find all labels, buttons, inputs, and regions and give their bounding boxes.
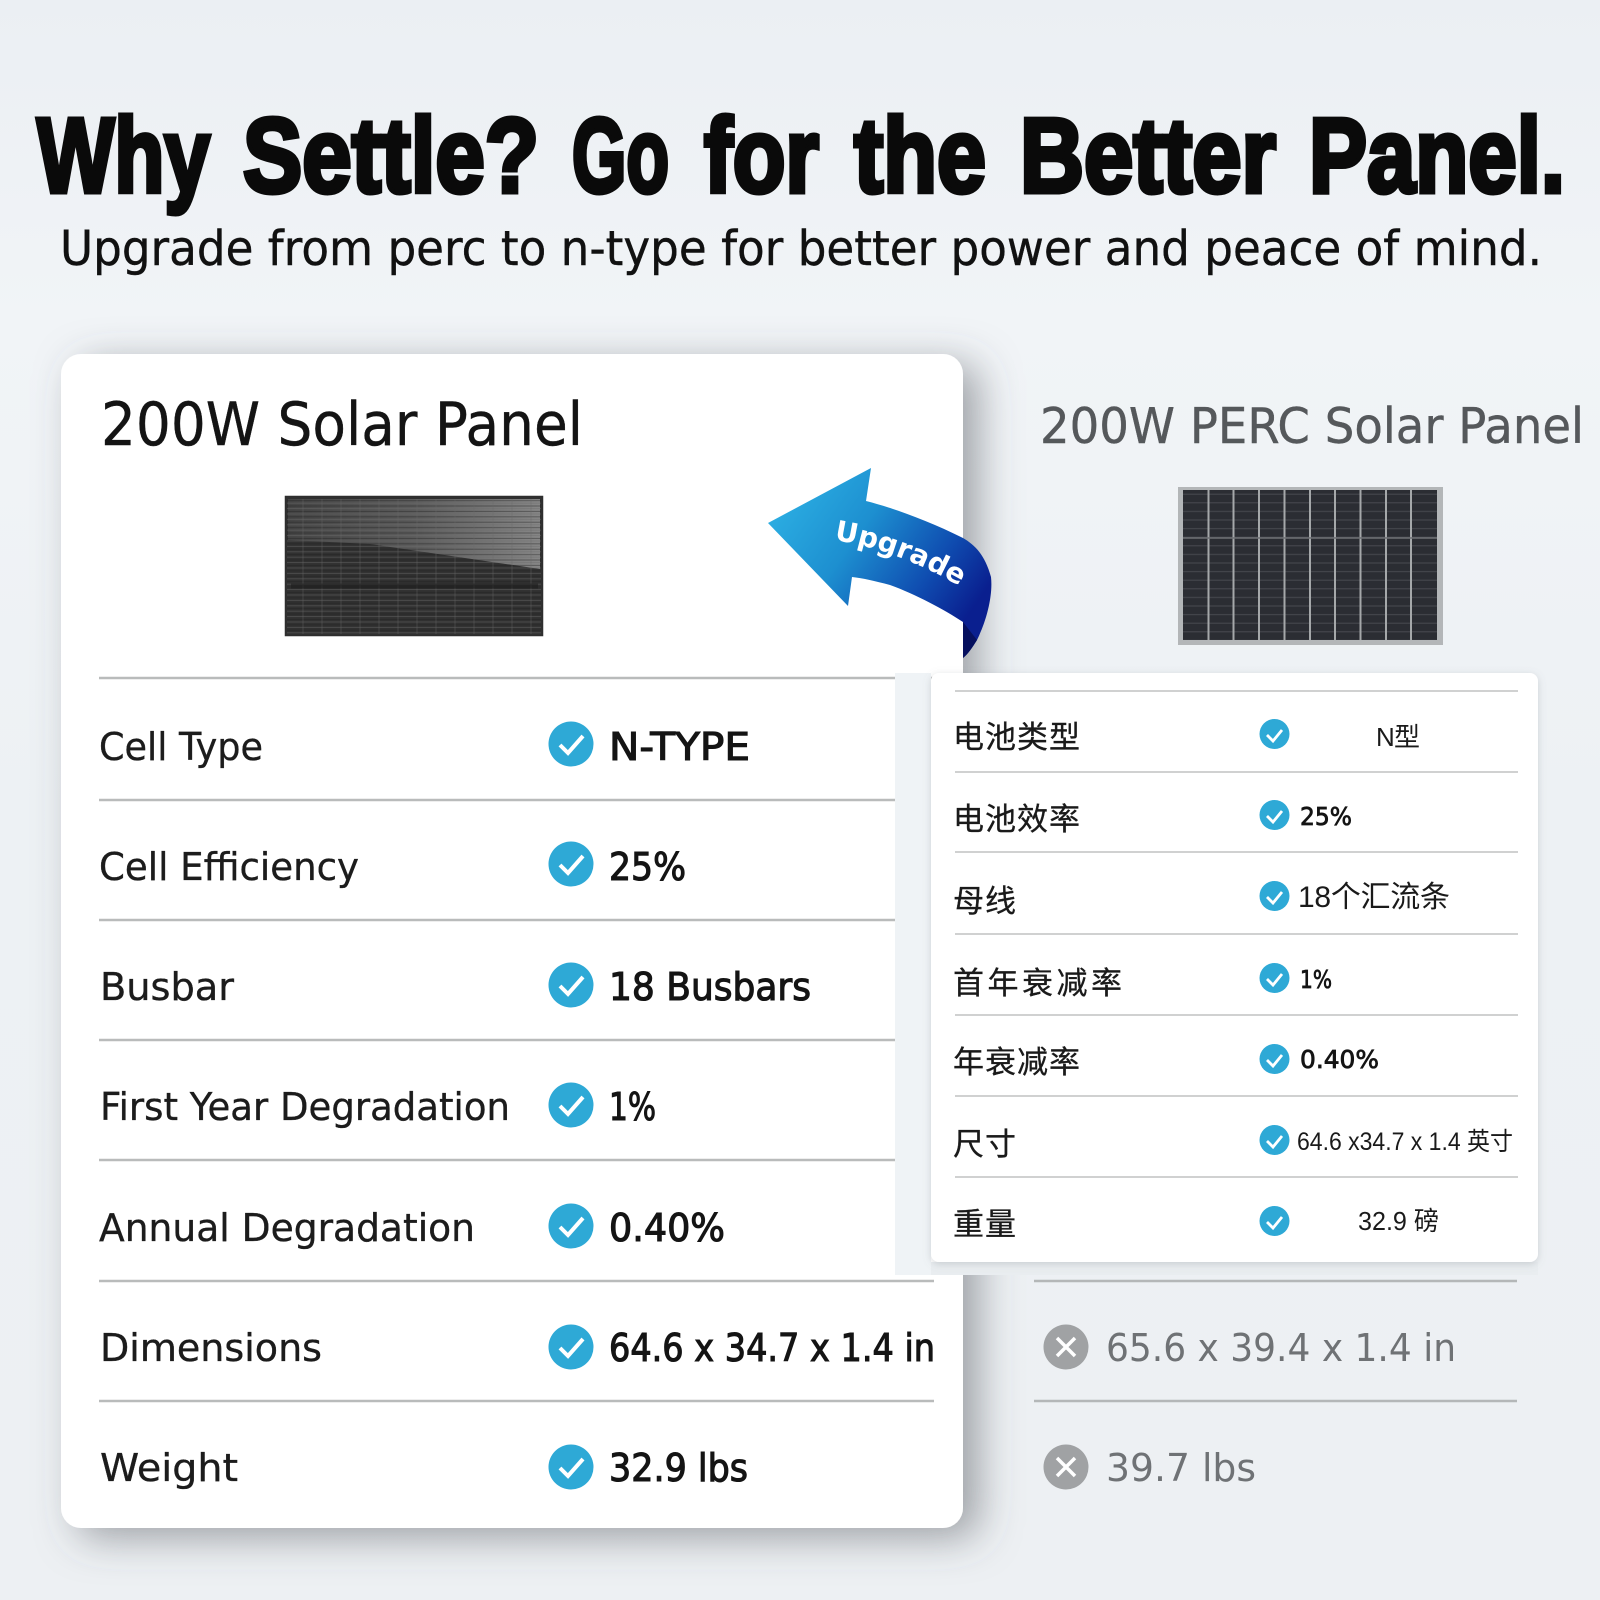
cn row: dimensions xyxy=(953,1125,1513,1162)
row dividers xyxy=(99,678,934,1401)
row: dimensions xyxy=(100,1324,935,1370)
cn row: cell type xyxy=(953,719,1420,755)
row: annual degradation: 0.40% xyxy=(609,1206,725,1250)
row: busbar xyxy=(100,962,811,1009)
cn row: busbar: 母线 xyxy=(953,884,1016,919)
cn row: weight: 32.9 磅 xyxy=(1358,1206,1439,1236)
row: busbar: Busbar xyxy=(100,965,234,1009)
right column dividers xyxy=(1034,1281,1517,1401)
image: PERC solar panel xyxy=(1178,487,1443,645)
cn row: weight: 重量 xyxy=(953,1207,1016,1242)
title: the xyxy=(854,97,986,215)
cn row: first year degradation: 1% xyxy=(1300,965,1332,994)
row: cell efficiency: Cell Efficiency xyxy=(99,845,359,889)
row: cell type: N-TYPE xyxy=(609,725,750,769)
cn row: annual degradation xyxy=(953,1044,1379,1080)
row: cell efficiency: 25% xyxy=(609,845,686,889)
title: for xyxy=(704,97,819,215)
title: Better xyxy=(1020,97,1276,215)
row: dimensions: Dimensions xyxy=(100,1326,322,1370)
cn row: dimensions: 64.6 x34.7 x 1.4 英寸 xyxy=(1297,1128,1513,1156)
cn row: dimensions: 尺寸 xyxy=(953,1127,1016,1162)
cn row: annual degradation: 0.40% xyxy=(1300,1045,1379,1074)
panel: Chinese specification table xyxy=(931,673,1538,1262)
table dividers xyxy=(955,691,1518,1177)
row: dimensions: 64.6 x 34.7 x 1.4 in xyxy=(609,1326,935,1370)
row: cell type xyxy=(99,722,750,769)
row: weight xyxy=(100,1444,748,1490)
cn row: cell type: N型 xyxy=(1376,722,1420,752)
row: first year degradation: First Year Degradation xyxy=(100,1085,510,1129)
PERC row: weight xyxy=(1044,1444,1256,1490)
cn row: first year degradation: 首年衰减率 xyxy=(953,966,1122,1001)
title: Go xyxy=(572,97,669,215)
row: busbar: 18 Busbars xyxy=(609,965,811,1009)
arrow: upgrade: Upgrade xyxy=(838,520,964,584)
arrow: upgrade xyxy=(768,468,992,658)
image: N-type black solar panel xyxy=(285,496,543,636)
subtitle: Upgrade from perc to n-type for better power and peace of mind. xyxy=(60,221,1542,277)
row: cell type: Cell Type xyxy=(99,725,263,769)
panel: 200W solar panel card xyxy=(61,354,963,1528)
PERC row: weight: 39.7 lbs xyxy=(1106,1446,1256,1490)
cn row: efficiency: 电池效率 xyxy=(953,802,1080,837)
cn row: annual degradation: 年衰减率 xyxy=(953,1045,1080,1080)
row: annual degradation: Annual Degradation xyxy=(99,1206,475,1250)
cn row: weight xyxy=(953,1206,1439,1242)
PERC row: dimensions: 65.6 x 39.4 x 1.4 in xyxy=(1106,1326,1456,1370)
row: annual degradation xyxy=(99,1204,725,1250)
cn row: efficiency: 25% xyxy=(1300,802,1352,831)
card heading: 200W Solar Panel xyxy=(101,390,583,460)
title: Why xyxy=(37,97,210,215)
row: first year degradation: 1% xyxy=(609,1085,656,1129)
cn row: cell type: 电池类型 xyxy=(953,720,1080,755)
title: Settle? xyxy=(243,97,539,215)
row: weight: Weight xyxy=(100,1446,238,1490)
cn row: first year degradation xyxy=(953,963,1332,1001)
heading: PERC panel: 200W PERC Solar Panel xyxy=(1040,398,1584,455)
row: weight: 32.9 lbs xyxy=(609,1446,748,1490)
title xyxy=(37,97,1565,215)
row: cell efficiency xyxy=(99,842,686,889)
cn row: busbar xyxy=(953,881,1450,919)
cn row: busbar: 18个汇流条 xyxy=(1298,881,1450,914)
panel: overlay backing strip xyxy=(895,673,931,1275)
cn row: efficiency xyxy=(953,800,1352,837)
